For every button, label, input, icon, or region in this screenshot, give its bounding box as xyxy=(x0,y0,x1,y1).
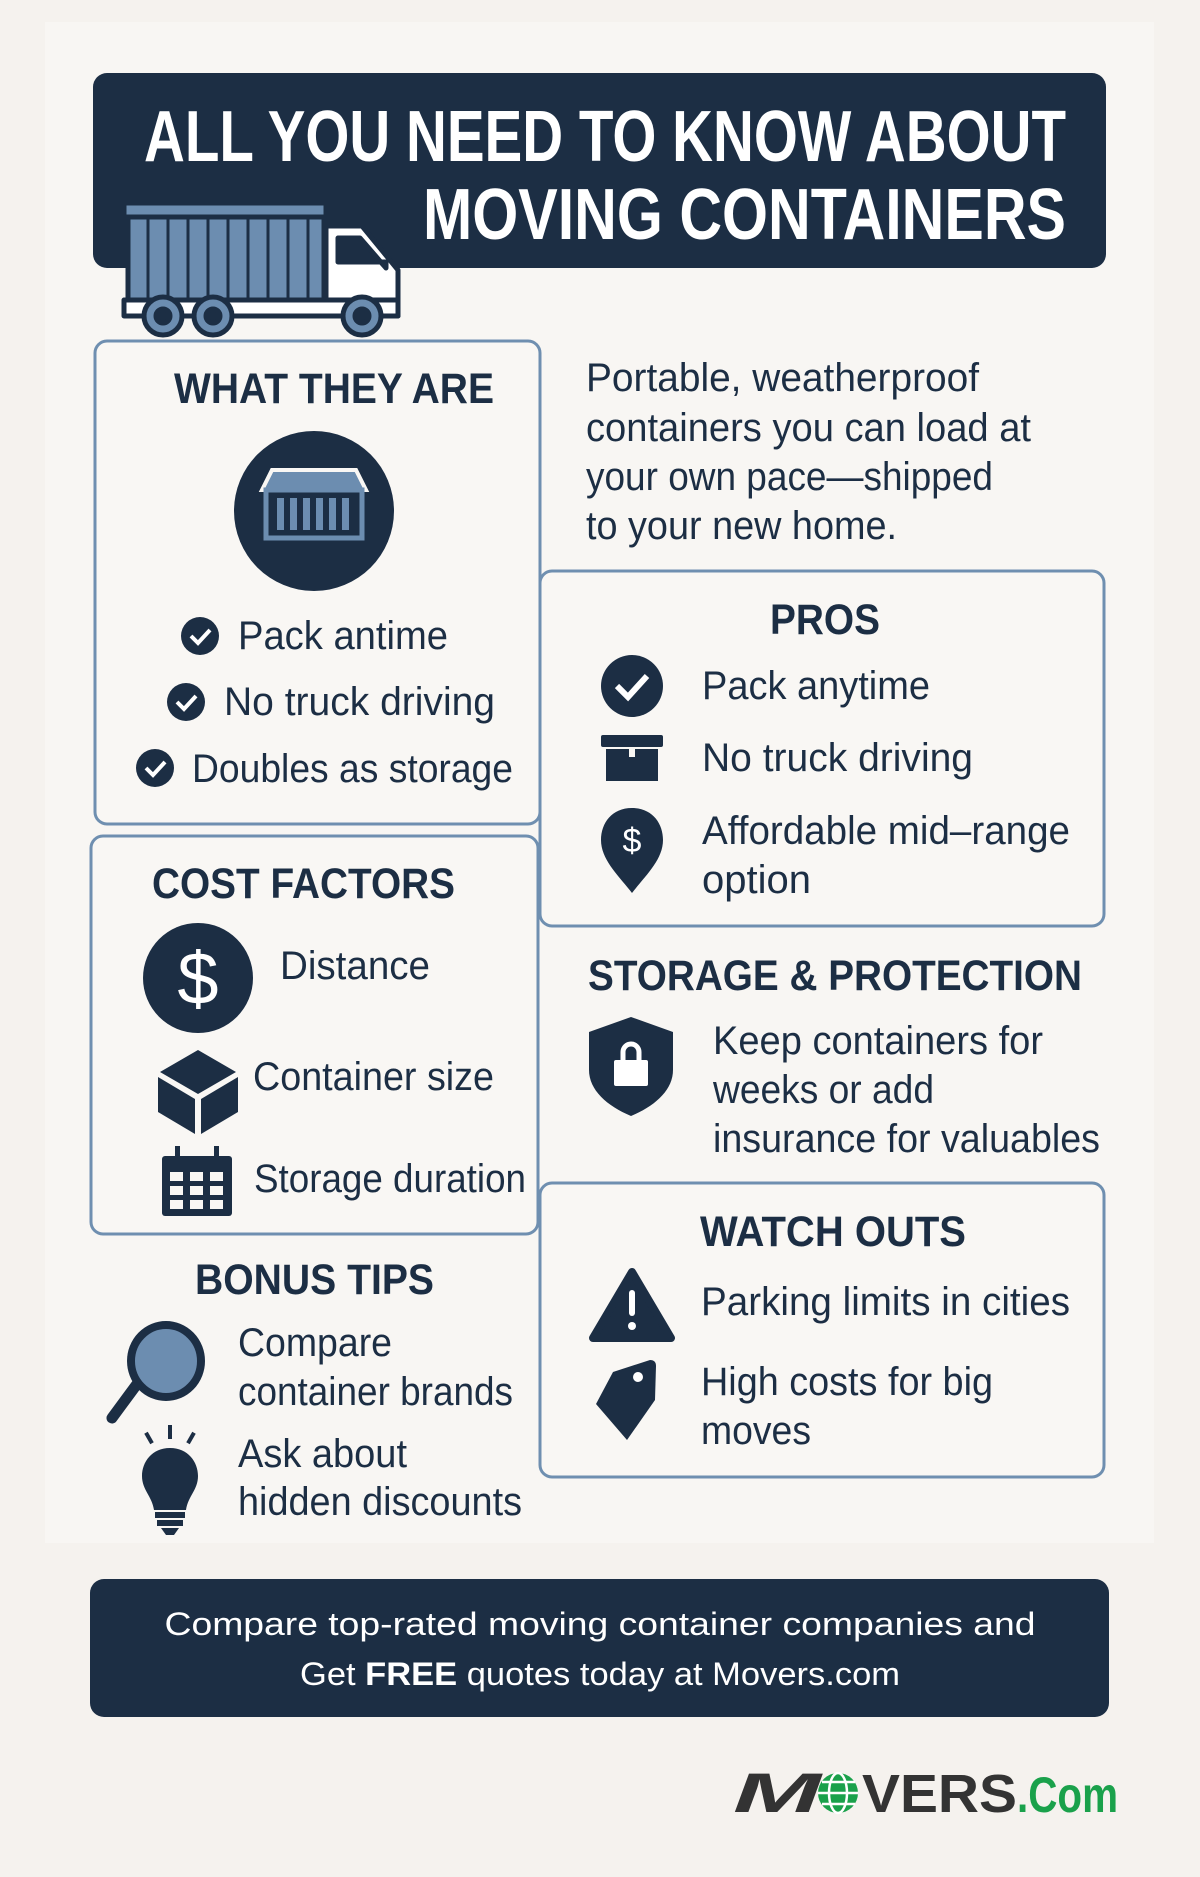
panel: watch outs: moves xyxy=(701,1409,811,1453)
panel: what they are xyxy=(95,341,540,824)
icon: truck xyxy=(124,203,398,335)
section: bonus tips xyxy=(112,1256,522,1535)
footer call to action: Compare top-rated moving container companies and xyxy=(164,1606,1036,1642)
check list: No truck driving xyxy=(224,680,495,724)
intro text: to your new home. xyxy=(586,504,897,548)
panel: pros: option xyxy=(702,858,811,902)
check list: Pack antime xyxy=(238,614,448,658)
panel: watch outs xyxy=(540,1183,1104,1477)
heading: what they are: WHAT THEY ARE xyxy=(174,365,494,413)
panel: cost factors: Distance xyxy=(280,944,430,988)
panel: watch outs: Parking limits in cities xyxy=(701,1280,1070,1324)
icon: warning xyxy=(593,1272,671,1338)
section: bonus tips: hidden discounts xyxy=(238,1480,522,1524)
panel: cost factors xyxy=(91,836,538,1234)
icon: light bulb xyxy=(142,1425,198,1535)
panel: pros: Pack anytime xyxy=(702,664,930,708)
section: storage & protection: STORAGE & PROTECTION xyxy=(588,952,1082,1000)
footer call to action xyxy=(90,1579,1109,1717)
section: bonus tips: Ask about xyxy=(238,1432,407,1476)
panel: pros: Affordable mid–range xyxy=(702,809,1070,853)
panel: pros xyxy=(540,571,1104,926)
icon: globe xyxy=(818,1773,858,1813)
logo: movers.com xyxy=(733,1761,1118,1824)
icon: dollar circle xyxy=(143,923,253,1033)
intro text: your own pace—shipped xyxy=(586,455,993,499)
icon: box xyxy=(601,735,663,781)
check list xyxy=(136,614,513,791)
icon: calendar xyxy=(162,1146,232,1216)
title xyxy=(144,97,1066,255)
panel: watch outs: High costs for big xyxy=(701,1360,993,1404)
logo: movers.com: .Com xyxy=(1017,1767,1118,1823)
section: storage & protection: Keep containers for xyxy=(713,1019,1043,1063)
icon: container circle xyxy=(234,431,394,591)
logo: movers.com: M xyxy=(733,1761,824,1824)
icon: magnifier xyxy=(112,1325,201,1418)
logo: movers.com: VERS xyxy=(862,1764,1017,1824)
icon: dollar circle: $ xyxy=(177,937,219,1020)
section: bonus tips: BONUS TIPS xyxy=(195,1256,434,1304)
icon: cube xyxy=(158,1050,238,1134)
header banner xyxy=(93,73,1106,268)
icon: dollar pin: $ xyxy=(623,822,642,860)
section: storage & protection xyxy=(588,952,1100,1161)
section: bonus tips: container brands xyxy=(238,1370,513,1414)
panel: pros: No truck driving xyxy=(702,736,973,780)
intro text xyxy=(586,356,1031,548)
intro text: containers you can load at xyxy=(586,406,1031,450)
check list: Doubles as storage xyxy=(192,747,513,791)
panel: cost factors: Storage duration xyxy=(254,1157,526,1201)
panel: watch outs: WATCH OUTS xyxy=(700,1208,966,1256)
section: storage & protection: weeks or add xyxy=(712,1068,934,1112)
panel: cost factors: COST FACTORS xyxy=(152,860,455,908)
icon: check xyxy=(601,655,663,717)
intro text: Portable, weatherproof xyxy=(586,356,980,400)
section: bonus tips: Compare xyxy=(238,1321,392,1365)
title: MOVING CONTAINERS xyxy=(423,175,1066,255)
icon: shield lock xyxy=(589,1017,673,1116)
footer call to action: Get FREE quotes today at Movers.com xyxy=(300,1656,900,1692)
section: storage & protection: insurance for valuables xyxy=(713,1117,1100,1161)
panel: cost factors: Container size xyxy=(253,1055,494,1099)
panel: pros: PROS xyxy=(770,596,880,644)
icon: tag xyxy=(596,1360,656,1440)
icon: dollar pin xyxy=(601,808,663,893)
